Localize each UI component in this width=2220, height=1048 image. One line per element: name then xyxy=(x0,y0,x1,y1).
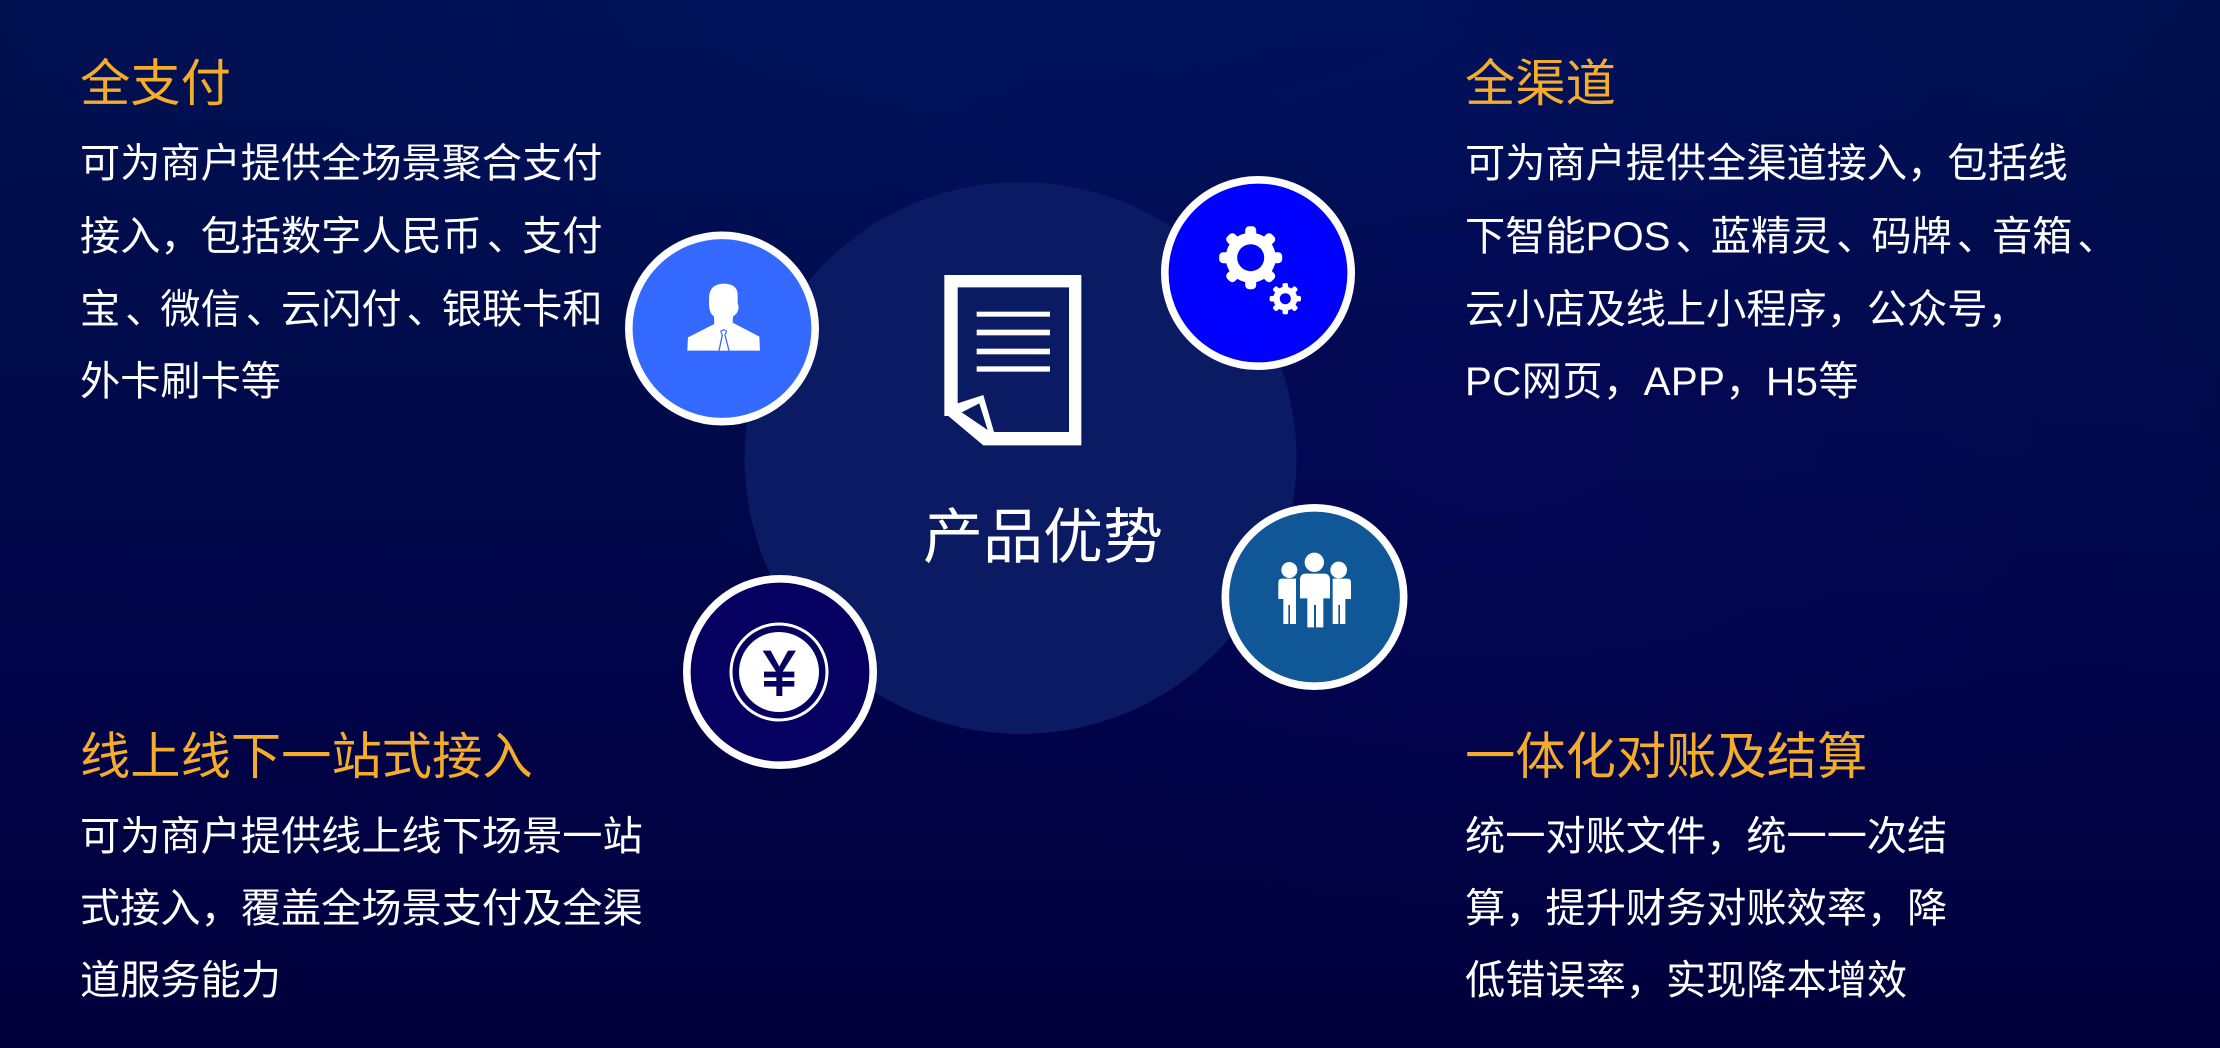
icon: yuan coin badge xyxy=(687,579,873,765)
body text: 算，提升财务对账效率，降 xyxy=(1465,886,1947,931)
icon: team badge xyxy=(1225,508,1404,686)
panel: 线上线下一站式接入 xyxy=(80,728,643,1003)
central circle panel xyxy=(744,182,1296,734)
body text: 可为商户提供全场景聚合支付 xyxy=(80,141,602,186)
body text: 外卡刷卡等 xyxy=(80,359,281,404)
body text: 式接入，覆盖全场景支付及全渠 xyxy=(80,886,643,931)
body text: 云小店及线上小程序，公众号， xyxy=(1465,287,2028,332)
panel: 全支付 xyxy=(80,55,603,404)
body text xyxy=(80,141,603,404)
panel: 一体化对账及结算 xyxy=(1465,728,1947,1003)
body text: 可为商户提供线上线下场景一站 xyxy=(80,814,643,859)
icon: gears badge xyxy=(1165,180,1351,366)
body text xyxy=(80,814,643,1003)
center title: 产品优势 xyxy=(923,504,1163,571)
body text: 接入，包括数字人民币、支付 xyxy=(80,214,602,259)
icon: person badge xyxy=(629,235,815,422)
body text: 低错误率，实现降本增效 xyxy=(1465,958,1907,1003)
panel: 全渠道 xyxy=(1465,55,2118,404)
icon: document xyxy=(944,275,1081,445)
heading: 全渠道 xyxy=(1465,55,1616,112)
body text: 宝、微信、云闪付、银联卡和 xyxy=(80,287,603,332)
body text: 道服务能力 xyxy=(80,958,281,1003)
body text: PC网页，APP，H5等 xyxy=(1465,359,1859,404)
heading: 一体化对账及结算 xyxy=(1465,728,1867,785)
heading: 全支付 xyxy=(80,55,231,112)
body text: 可为商户提供全渠道接入，包括线 xyxy=(1465,141,2068,186)
heading: 线上线下一站式接入 xyxy=(80,728,533,785)
body text xyxy=(1465,814,1947,1003)
body text: 下智能POS、蓝精灵、码牌、音箱、 xyxy=(1465,214,2118,259)
body text xyxy=(1465,141,2118,404)
body text: 统一对账文件，统一一次结 xyxy=(1465,814,1947,859)
